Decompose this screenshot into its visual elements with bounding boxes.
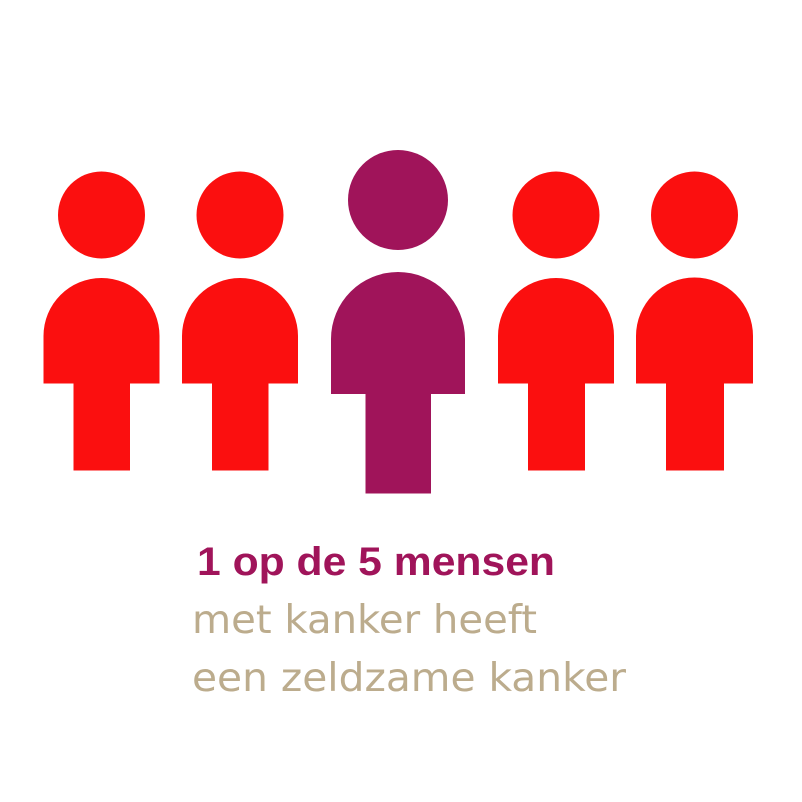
icon: highlighted person 3 — [331, 150, 465, 494]
icon: person 2 — [182, 172, 298, 470]
icon: person 4 — [498, 172, 614, 470]
icon: person 1 — [44, 172, 160, 470]
heading: 1 op de 5 mensen — [197, 540, 555, 584]
icon: person 5 — [636, 172, 753, 470]
text block: statistic — [192, 540, 627, 701]
text line 1: met kanker heeft — [192, 598, 537, 643]
text line 2: een zeldzame kanker — [192, 656, 627, 701]
